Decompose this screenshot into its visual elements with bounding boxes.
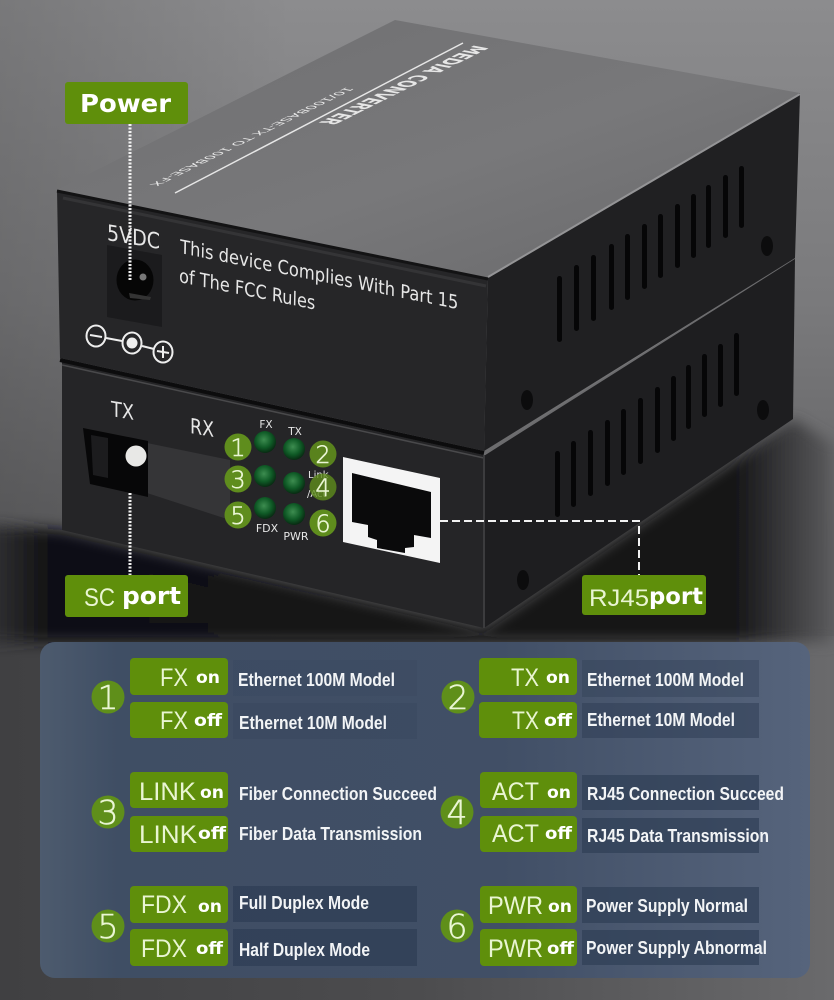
FCC compliance text: of The FCC Rules [179, 265, 316, 315]
legend group 6: PWR: Power Supply Normal [586, 896, 748, 916]
legend group 5: FDX: on [198, 897, 222, 917]
top unit side [484, 93, 800, 451]
legend group 5: FDX [92, 886, 370, 966]
LED labels: PWR [283, 530, 309, 543]
legend group 3: LINK: 3 [98, 793, 118, 832]
legend group 4: ACT: ACT [492, 778, 539, 806]
legend group 1: FX: 1 [98, 678, 118, 717]
legend group 4: ACT: RJ45 Data Transmission [587, 826, 769, 846]
top face printed text [145, 43, 492, 193]
table reflection [0, 419, 834, 642]
legend group 3: LINK: LINK [139, 821, 197, 849]
LED labels: FX [259, 419, 273, 431]
LED indicators [254, 431, 305, 525]
legend group 5: FDX: Half Duplex Mode [239, 940, 370, 960]
legend group 4: ACT: ACT [492, 820, 539, 848]
top unit front [57, 190, 488, 451]
media converter title: MEDIA CONVERTER [312, 44, 492, 126]
legend group 4: ACT: RJ45 Connection Succeed [587, 784, 784, 804]
legend group 5: FDX: off [196, 939, 223, 959]
power callout [65, 82, 188, 280]
5VDC power socket: 5VDC [107, 220, 160, 255]
number badges on device: 1 [230, 434, 246, 462]
legend group 6: PWR: on [548, 897, 572, 917]
legend group 1: FX: FX [160, 664, 188, 692]
legend group 3: LINK: LINK [139, 778, 196, 806]
number badges on device: 5 [230, 502, 246, 530]
legend group 3: LINK: on [200, 783, 224, 803]
legend group 6: PWR: Power Supply Abnormal [586, 938, 767, 958]
legend group 5: FDX: 5 [98, 907, 118, 946]
legend group 2: TX: Ethernet 10M Model [587, 710, 735, 730]
lower unit front [60, 360, 484, 628]
LED labels [256, 419, 329, 543]
SC fiber port [83, 428, 230, 520]
legend group 2: TX: TX [512, 707, 539, 735]
legend group 1: FX: Ethernet 10M Model [239, 713, 387, 733]
polarity symbol [86, 326, 172, 362]
TX RX labels: TX [110, 396, 134, 425]
RJ45 port [343, 457, 440, 563]
FCC compliance text: This device Complies With Part 15 [179, 236, 459, 314]
LED labels: FDX [256, 522, 279, 535]
legend group 3: LINK: off [198, 824, 226, 844]
number badges on device: 4 [315, 474, 331, 502]
top unit top face [57, 20, 800, 278]
SC port callout [65, 493, 188, 617]
legend group 3: LINK: Fiber Data Transmission [239, 824, 422, 844]
legend group 5: FDX: FDX [141, 891, 187, 919]
model subtitle: 10/100BASE-TX TO 100BASE-FX [145, 86, 356, 187]
power callout: Power [80, 89, 172, 118]
panel: LED status legend [40, 642, 810, 978]
legend group 2: TX [442, 658, 744, 738]
TX RX labels: RX [190, 413, 214, 442]
RJ45 port callout [440, 521, 706, 615]
legend group 2: TX: off [544, 711, 572, 731]
number badges on device: 3 [230, 466, 246, 494]
legend group 1: FX: off [194, 711, 222, 731]
SC port callout: SC [84, 584, 115, 612]
legend group 6: PWR: PWR [488, 892, 543, 920]
number badges on device: 6 [315, 510, 331, 538]
SC port callout: port [122, 582, 181, 610]
legend group 1: FX: FX [160, 707, 188, 735]
legend group 2: TX: 2 [448, 678, 468, 717]
legend group 2: TX: Ethernet 100M Model [587, 670, 744, 690]
legend group 6: PWR: 6 [446, 907, 468, 946]
legend group 5: FDX: Full Duplex Mode [239, 893, 369, 913]
5VDC power socket [107, 220, 162, 327]
description strips [233, 660, 759, 966]
legend group 4: ACT [440, 772, 784, 852]
legend group 3: LINK: Fiber Connection Succeed [239, 784, 437, 804]
LED labels: TX [287, 426, 302, 438]
legend group 1: FX: Ethernet 100M Model [238, 670, 395, 690]
legend group 1: FX: on [196, 668, 220, 688]
LED labels: /Act [307, 489, 327, 500]
media converter device [57, 20, 800, 628]
RJ45 port callout: RJ45 [589, 585, 649, 612]
legend group 2: TX: on [546, 668, 570, 688]
number badges on device [224, 434, 336, 538]
legend group 1: FX [92, 658, 395, 738]
legend group 4: ACT: on [547, 783, 571, 803]
legend group 2: TX: TX [511, 664, 539, 692]
legend group 6: PWR: off [547, 939, 574, 959]
legend group 5: FDX: FDX [141, 935, 187, 963]
TX RX labels [110, 396, 214, 442]
legend group 4: ACT: off [545, 824, 572, 844]
LED labels: Link [308, 470, 329, 481]
legend group 6: PWR: PWR [488, 935, 543, 963]
legend group 3: LINK [92, 772, 437, 852]
RJ45 port callout: port [649, 584, 703, 610]
legend group 6: PWR [440, 886, 767, 966]
legend group 4: ACT: 4 [446, 793, 468, 832]
number badges on device: 2 [315, 441, 331, 469]
lower unit side [484, 258, 795, 628]
